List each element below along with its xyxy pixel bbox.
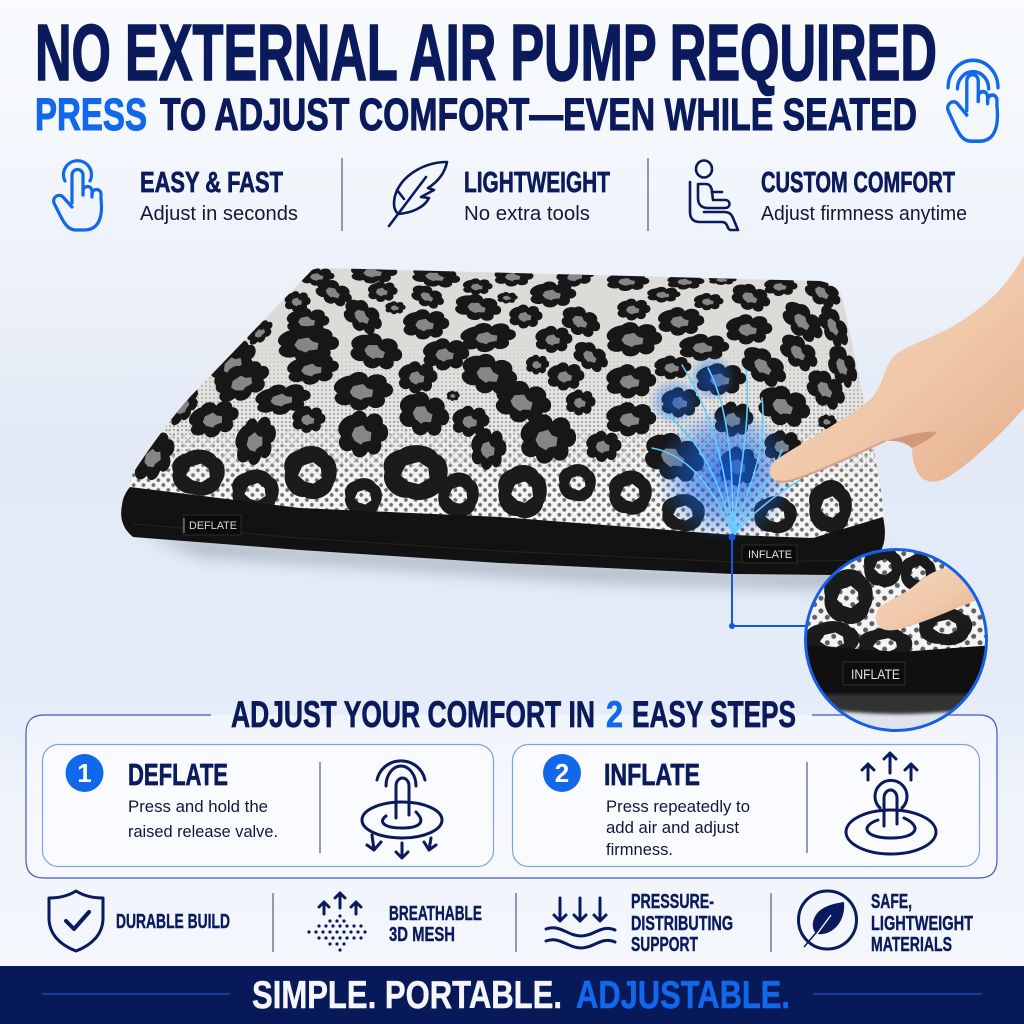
icon: feather xyxy=(389,162,447,226)
benefit: custom comfort xyxy=(690,160,967,230)
divider xyxy=(515,893,517,952)
icon: hand tap xyxy=(54,161,101,230)
icon: shield xyxy=(49,891,103,951)
step card: inflate: Press repeatedly to xyxy=(606,798,750,816)
benefit: easy and fast xyxy=(54,161,298,230)
step card: deflate: Press and hold the xyxy=(128,798,268,816)
feature: safe lightweight materials: SAFE, xyxy=(871,891,912,913)
feature: safe lightweight materials: MATERIALS xyxy=(871,934,952,956)
cushion front band xyxy=(121,487,885,575)
icon: mesh with arrows xyxy=(309,893,372,950)
feature: safe lightweight materials xyxy=(798,891,973,956)
step card: inflate: INFLATE xyxy=(604,757,700,792)
callout line xyxy=(728,534,806,629)
footer banner: ADJUSTABLE. xyxy=(576,974,790,1017)
inflate tag: INFLATE xyxy=(748,549,792,561)
feature: pressure distributing support xyxy=(546,891,733,956)
icon: seated person xyxy=(690,160,738,230)
step card: deflate: DEFLATE xyxy=(128,757,228,792)
feature: breathable mesh: BREATHABLE xyxy=(389,903,482,925)
divider xyxy=(647,158,649,231)
feature: safe lightweight materials: LIGHTWEIGHT xyxy=(871,913,973,935)
icon: leaf in circle xyxy=(798,891,856,949)
inset: inflate detail xyxy=(800,545,995,733)
cushion mesh top xyxy=(130,268,884,538)
section heading: ADJUST YOUR COMFORT IN xyxy=(231,694,595,735)
feature: pressure distributing support: PRESSURE- xyxy=(631,891,714,913)
cushion shadow xyxy=(140,532,892,590)
hand pressing cushion xyxy=(770,255,1024,482)
deflate tag xyxy=(183,515,241,535)
divider xyxy=(272,893,274,952)
step card: deflate: raised release valve. xyxy=(128,823,278,841)
inset finger xyxy=(876,568,985,630)
step number 2 xyxy=(543,754,581,792)
air flow burst xyxy=(649,354,800,542)
feature: pressure distributing support: SUPPORT xyxy=(631,934,698,956)
step card: inflate xyxy=(512,744,980,866)
icon: inflate valve xyxy=(846,753,936,854)
section heading: 2 xyxy=(606,694,623,735)
step number 1: 1 xyxy=(77,758,92,788)
divider xyxy=(770,893,772,952)
outer steps panel xyxy=(26,715,997,878)
benefit: easy and fast: EASY & FAST xyxy=(140,167,283,199)
inflate tag xyxy=(742,545,797,563)
feature: durable build xyxy=(49,891,230,951)
step card: inflate: firmness. xyxy=(606,841,673,859)
inset inflate tag xyxy=(843,662,905,685)
benefit: lightweight: No extra tools xyxy=(464,203,590,225)
benefit: easy and fast: Adjust in seconds xyxy=(140,203,298,225)
step card: deflate xyxy=(42,744,494,866)
divider xyxy=(341,158,343,231)
step card: inflate: add air and adjust xyxy=(606,819,739,837)
feature: pressure distributing support: DISTRIBUTING xyxy=(631,913,733,935)
benefit: lightweight xyxy=(389,162,610,226)
icon: press hand, top right xyxy=(948,60,998,141)
step number 1 xyxy=(66,754,104,792)
step number 2: 2 xyxy=(555,758,569,788)
feature: breathable mesh xyxy=(309,893,482,950)
section heading: EASY STEPS xyxy=(632,694,796,735)
inset inflate tag: INFLATE xyxy=(851,667,900,682)
benefit: custom comfort: Adjust firmness anytime xyxy=(761,203,967,225)
icon: arrows over waves xyxy=(546,898,615,948)
feature: breathable mesh: 3D MESH xyxy=(389,924,455,946)
product: air cushion xyxy=(100,260,920,590)
footer banner: SIMPLE. PORTABLE. xyxy=(252,974,562,1017)
feature: durable build: DURABLE BUILD xyxy=(116,911,230,933)
footer banner xyxy=(0,966,1024,1024)
icon: deflate valve xyxy=(362,761,442,858)
benefit: lightweight: LIGHTWEIGHT xyxy=(464,167,610,199)
leopard spots xyxy=(130,262,860,533)
deflate tag: DEFLATE xyxy=(189,520,237,532)
subtitle: PRESS xyxy=(35,89,147,140)
